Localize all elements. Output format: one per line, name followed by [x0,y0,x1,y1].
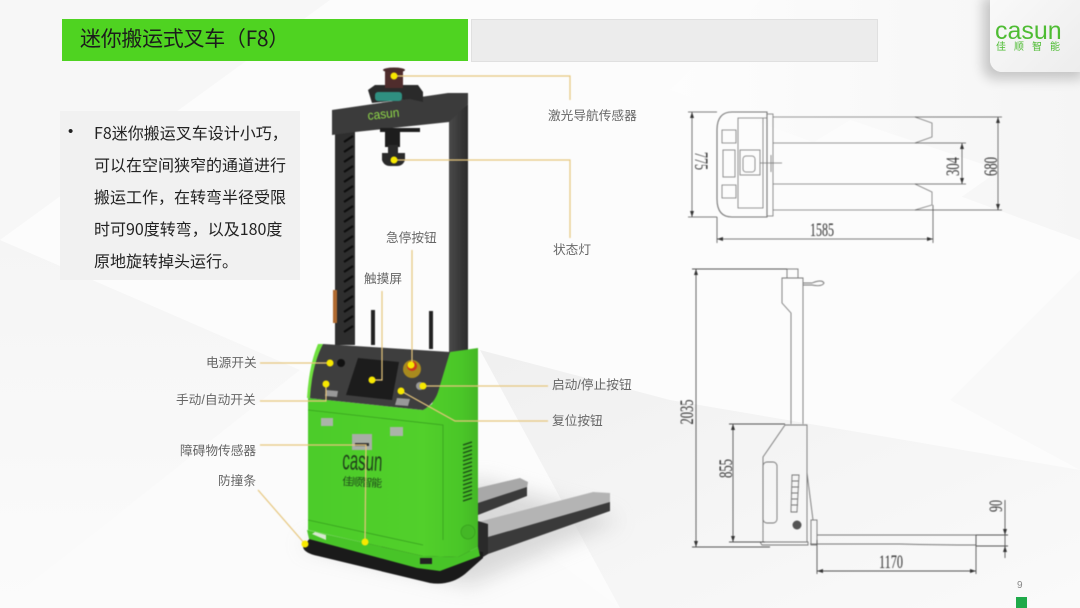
description text: 搬运工作，在转弯半径受限 [94,184,286,208]
title bar: green [62,19,468,61]
touch screen [346,358,399,400]
description text: 时可90度转弯，以及180度 [94,216,282,240]
description text [94,120,288,272]
status light [380,128,420,166]
antennas [333,290,433,349]
logo wordmark: casun [995,17,1062,45]
description text: 原地旋转掉头运行。 [94,248,238,272]
text panel [60,111,300,280]
callout dots [302,72,426,548]
label: manual auto switch: 手动/自动开关 [176,393,256,407]
logo chinese name: 佳顺智能 [996,42,1068,53]
label: emergency stop: 急停按钮 [386,231,437,245]
body: side face [423,348,478,557]
callout leader lines [258,76,570,544]
dimension 775: 775 [690,152,711,170]
label: reset button: 复位按钮 [552,414,603,428]
floor shadow [300,480,620,585]
side view wheel [792,520,802,530]
body logo [342,445,383,490]
power knob [337,359,345,367]
label: laser navigation sensor: 激光导航传感器 [548,109,637,123]
fork: front [478,492,610,560]
obstacle sensors [321,418,403,450]
body logo: 佳顺智能 [342,474,383,490]
switch plates [325,390,338,397]
label: bumper: 防撞条 [218,474,256,488]
dimension 304: 304 [943,157,964,176]
base [303,530,483,584]
body: front face [308,398,423,556]
emergency stop button [403,360,421,378]
description text: 可以在空间狭窄的通道进行 [94,152,286,176]
label: status light: 状态灯 [553,243,591,257]
dimension 1585: 1585 [810,220,834,241]
label: obstacle sensor: 障碍物传感器 [180,444,256,458]
dimension 1170: 1170 [879,552,903,573]
fork: rear [478,478,528,515]
body: control panel [307,344,450,410]
description text: F8迷你搬运叉车设计小巧， [94,120,288,144]
mast [332,93,468,353]
dimension 2035: 2035 [677,400,698,424]
title: 迷你搬运式叉车（F8） [80,23,289,53]
mast logo: casun [367,105,400,123]
body: seams [308,410,475,545]
label: start stop button: 启动/停止按钮 [552,378,632,392]
dimension 680: 680 [981,157,1002,176]
logo card [990,0,1080,72]
label: touch screen: 触摸屏 [364,272,402,286]
label: power switch: 电源开关 [206,356,257,370]
dimension 90: 90 [986,500,1007,512]
side vents [463,442,472,501]
bullet: • [68,123,73,140]
page marker [1016,597,1027,608]
dimension 855: 855 [716,459,737,478]
laser navigation sensor [368,68,423,103]
body logo: casun [342,445,383,477]
title bar: grey extension [471,19,878,62]
page number: 9 [1017,580,1023,591]
